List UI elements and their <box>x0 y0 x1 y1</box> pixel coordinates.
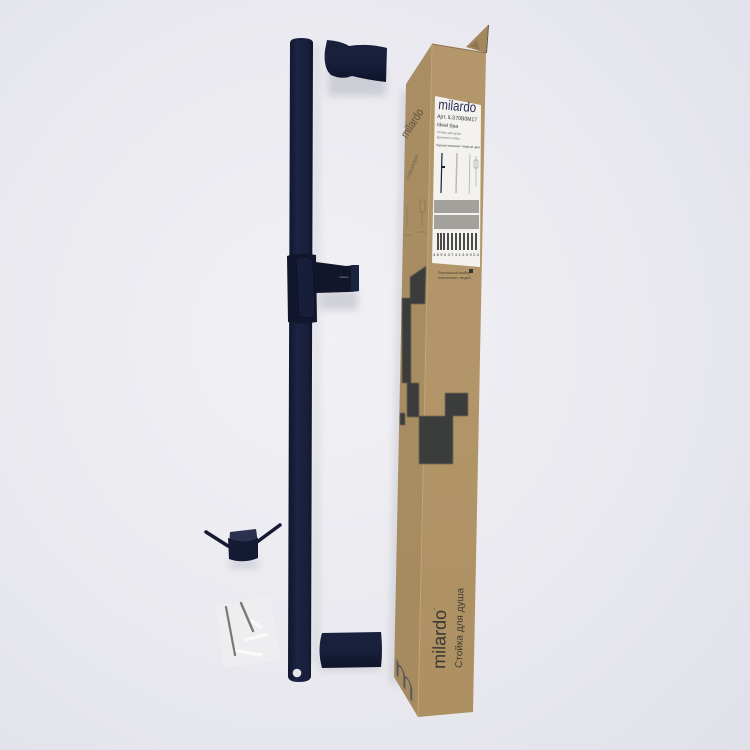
icons on box side <box>403 200 427 235</box>
product description: Черный матовый / Чёрный цвет <box>436 143 481 149</box>
plastic bag <box>216 595 281 668</box>
product description: Стойка для душа <box>437 130 461 136</box>
lower wall bracket <box>320 632 382 668</box>
shower rail <box>288 38 313 682</box>
fine print <box>434 200 479 229</box>
article number: Арт. ILS70B0M17 <box>437 114 477 123</box>
cardboard box <box>394 25 489 717</box>
holder tip <box>351 265 359 292</box>
barcode: 4690374130924 <box>433 252 480 257</box>
box tagline: Роскошный выбор <box>438 271 470 275</box>
product description: Душевая стойка <box>437 135 460 141</box>
barcode <box>433 233 480 257</box>
wings <box>206 525 280 546</box>
box top edge highlight <box>432 44 486 53</box>
product description <box>436 130 481 149</box>
holder arm <box>316 262 359 293</box>
short screw <box>241 603 253 631</box>
nut top <box>229 529 258 545</box>
box fold line <box>418 44 432 717</box>
product name on box side: Стойка для душа <box>404 154 420 181</box>
upper wall bracket <box>325 40 387 82</box>
bag creases <box>232 620 268 655</box>
nut body <box>228 538 258 561</box>
shadows <box>230 44 408 690</box>
long screw <box>226 607 235 655</box>
box left face <box>394 44 432 717</box>
slider body <box>287 254 317 324</box>
mounting hole <box>293 669 301 677</box>
slider face <box>296 257 315 318</box>
screw bag <box>216 595 281 668</box>
brand name: milardo <box>438 96 477 115</box>
wing nut <box>206 525 280 561</box>
product photo <box>204 25 750 750</box>
brand on box side: milardo <box>398 106 427 141</box>
box tagline: элегантных людей <box>438 276 471 280</box>
series name: Ideal Spa <box>437 122 459 130</box>
box flap <box>466 25 489 53</box>
product drawings <box>441 153 478 194</box>
brand on box front: ° <box>433 608 439 610</box>
box tagline <box>438 269 473 280</box>
white product label <box>432 96 481 267</box>
box front face <box>418 44 486 717</box>
sliding holder <box>287 254 359 324</box>
rail tube <box>288 38 313 682</box>
graphic blocks on box <box>400 266 468 464</box>
holder marking: milardo <box>339 275 349 279</box>
product name on box front: Стойка для душа <box>454 587 466 668</box>
brand on box front: milardo <box>429 610 450 669</box>
m logo on box side: m <box>395 645 414 712</box>
